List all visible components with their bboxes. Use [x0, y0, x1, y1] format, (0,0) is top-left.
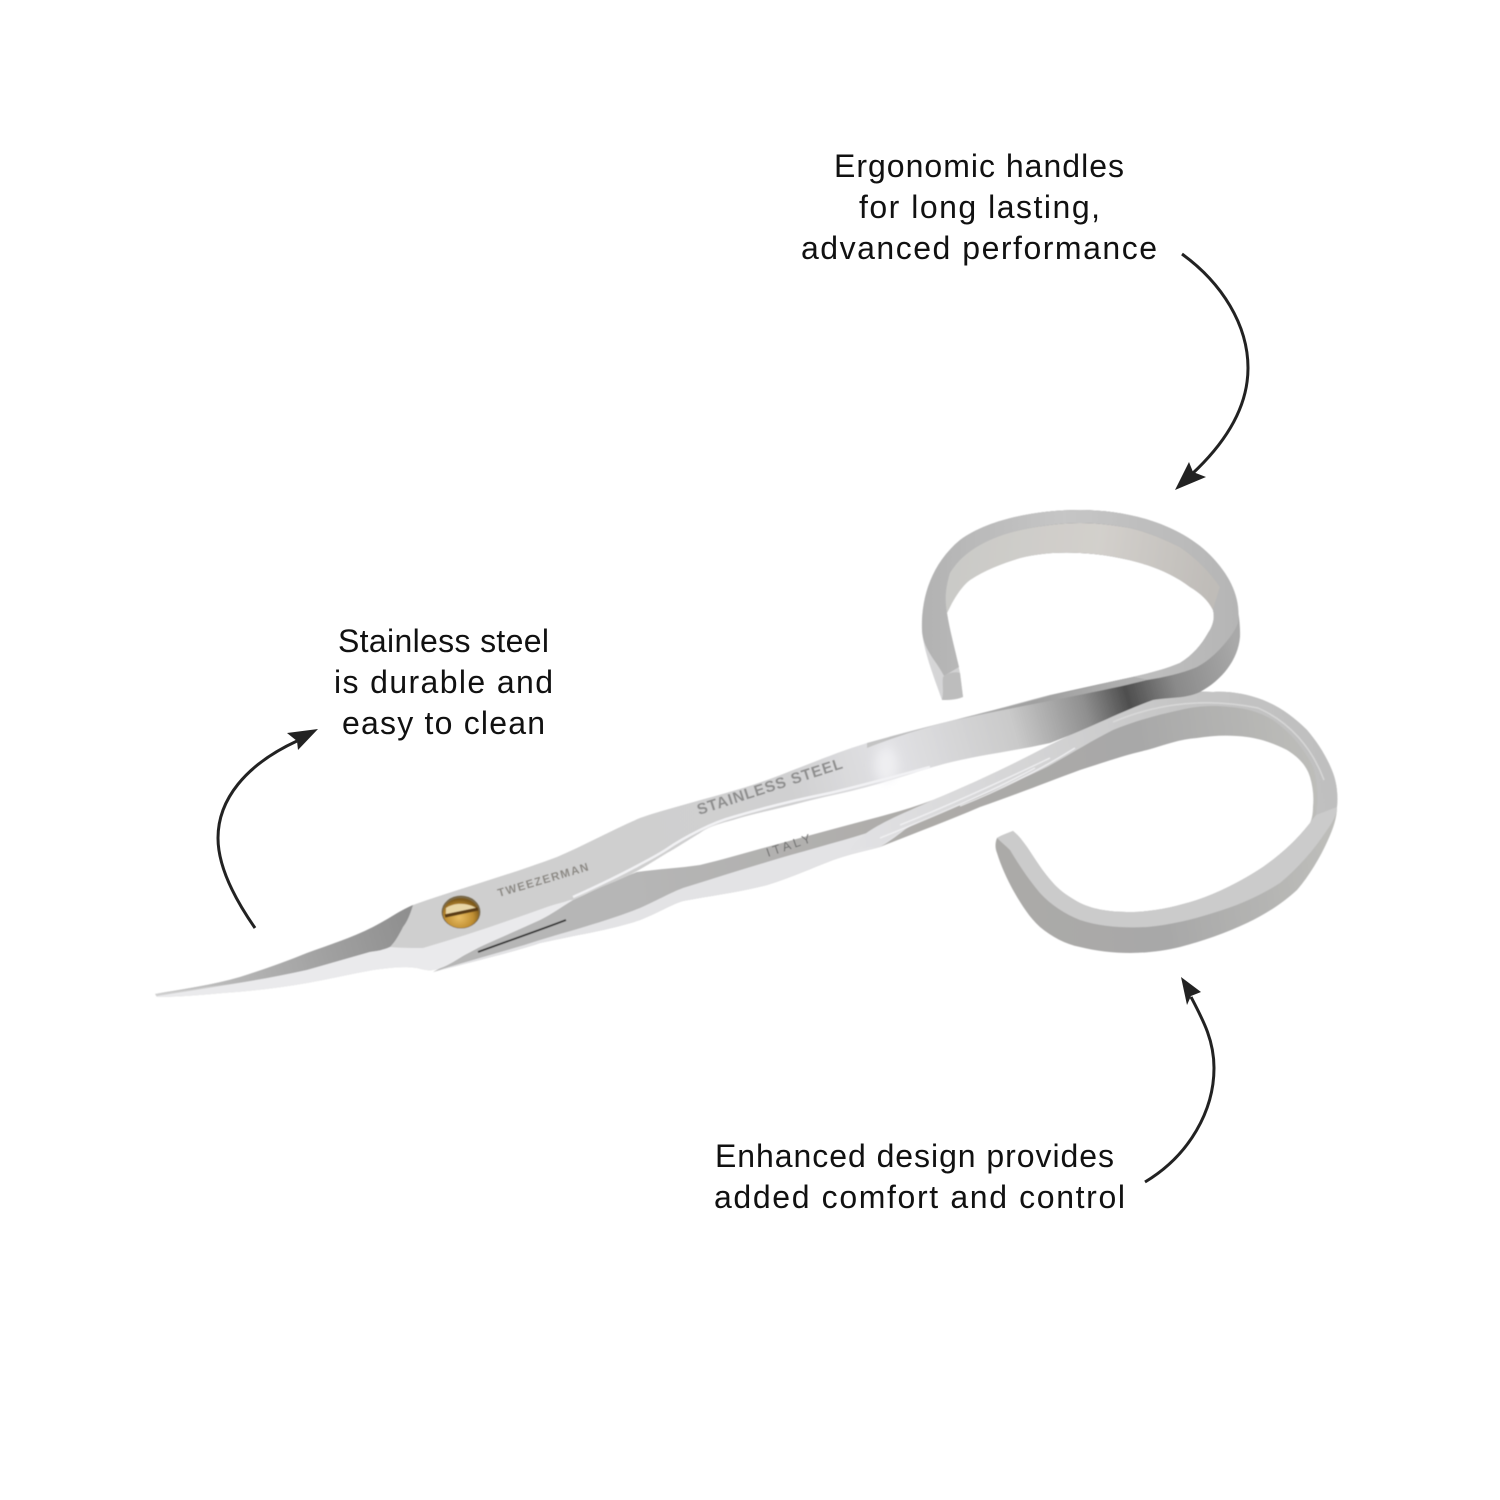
ring two upper highlight: [1113, 703, 1324, 780]
ring one inner wall: [946, 523, 1220, 613]
callout: stainless steel: is durable and: [334, 664, 553, 700]
bright reflection on arm: [875, 747, 897, 783]
blade ground facet: [155, 905, 413, 994]
arm lower bevel line: [573, 767, 930, 897]
ring two top face upper: [850, 691, 1337, 850]
callout: ergonomic handles: for long lasting,: [859, 189, 1100, 225]
gap shadow line: [478, 920, 566, 952]
ring one tip end cap: [942, 672, 963, 700]
upper blade arm and ring handle: [155, 510, 1240, 997]
scissors illustration: [155, 510, 1337, 997]
pivot screw: [442, 896, 480, 928]
arrow: from blade to stainless steel note: [218, 729, 318, 928]
arrow: to lower handle: [1145, 977, 1214, 1182]
blade bright bevel: [157, 900, 573, 997]
callout: stainless steel: easy to clean: [342, 705, 545, 741]
lower arm bright bevel: [433, 806, 933, 972]
engraved text: Tweezerman: TWEEZERMAN: [496, 862, 590, 900]
callout: enhanced design: Enhanced design provides: [715, 1138, 1114, 1174]
engraved text: Italy: ITALY: [764, 831, 813, 860]
callout: ergonomic handles: Ergonomic handles: [834, 148, 1124, 184]
brushed streaks on lower arm: [880, 748, 1075, 838]
lower blade arm and ring handle: [433, 691, 1337, 972]
arrow: to upper handle: [1175, 254, 1248, 490]
callout: stainless steel: Stainless steel: [338, 623, 549, 659]
callout: ergonomic handles: [801, 148, 1157, 266]
ring one top face: [922, 510, 1239, 680]
callout: ergonomic handles: advanced performance: [801, 230, 1157, 266]
callout: enhanced design: [714, 1138, 1125, 1215]
engraved text: Stainless Steel: STAINLESS STEEL: [695, 756, 845, 819]
callout: enhanced design: added comfort and control: [714, 1179, 1125, 1215]
callout: stainless steel: [334, 623, 553, 741]
ring two top face lower: [997, 807, 1337, 927]
upper arm top face strip: [867, 677, 1147, 748]
